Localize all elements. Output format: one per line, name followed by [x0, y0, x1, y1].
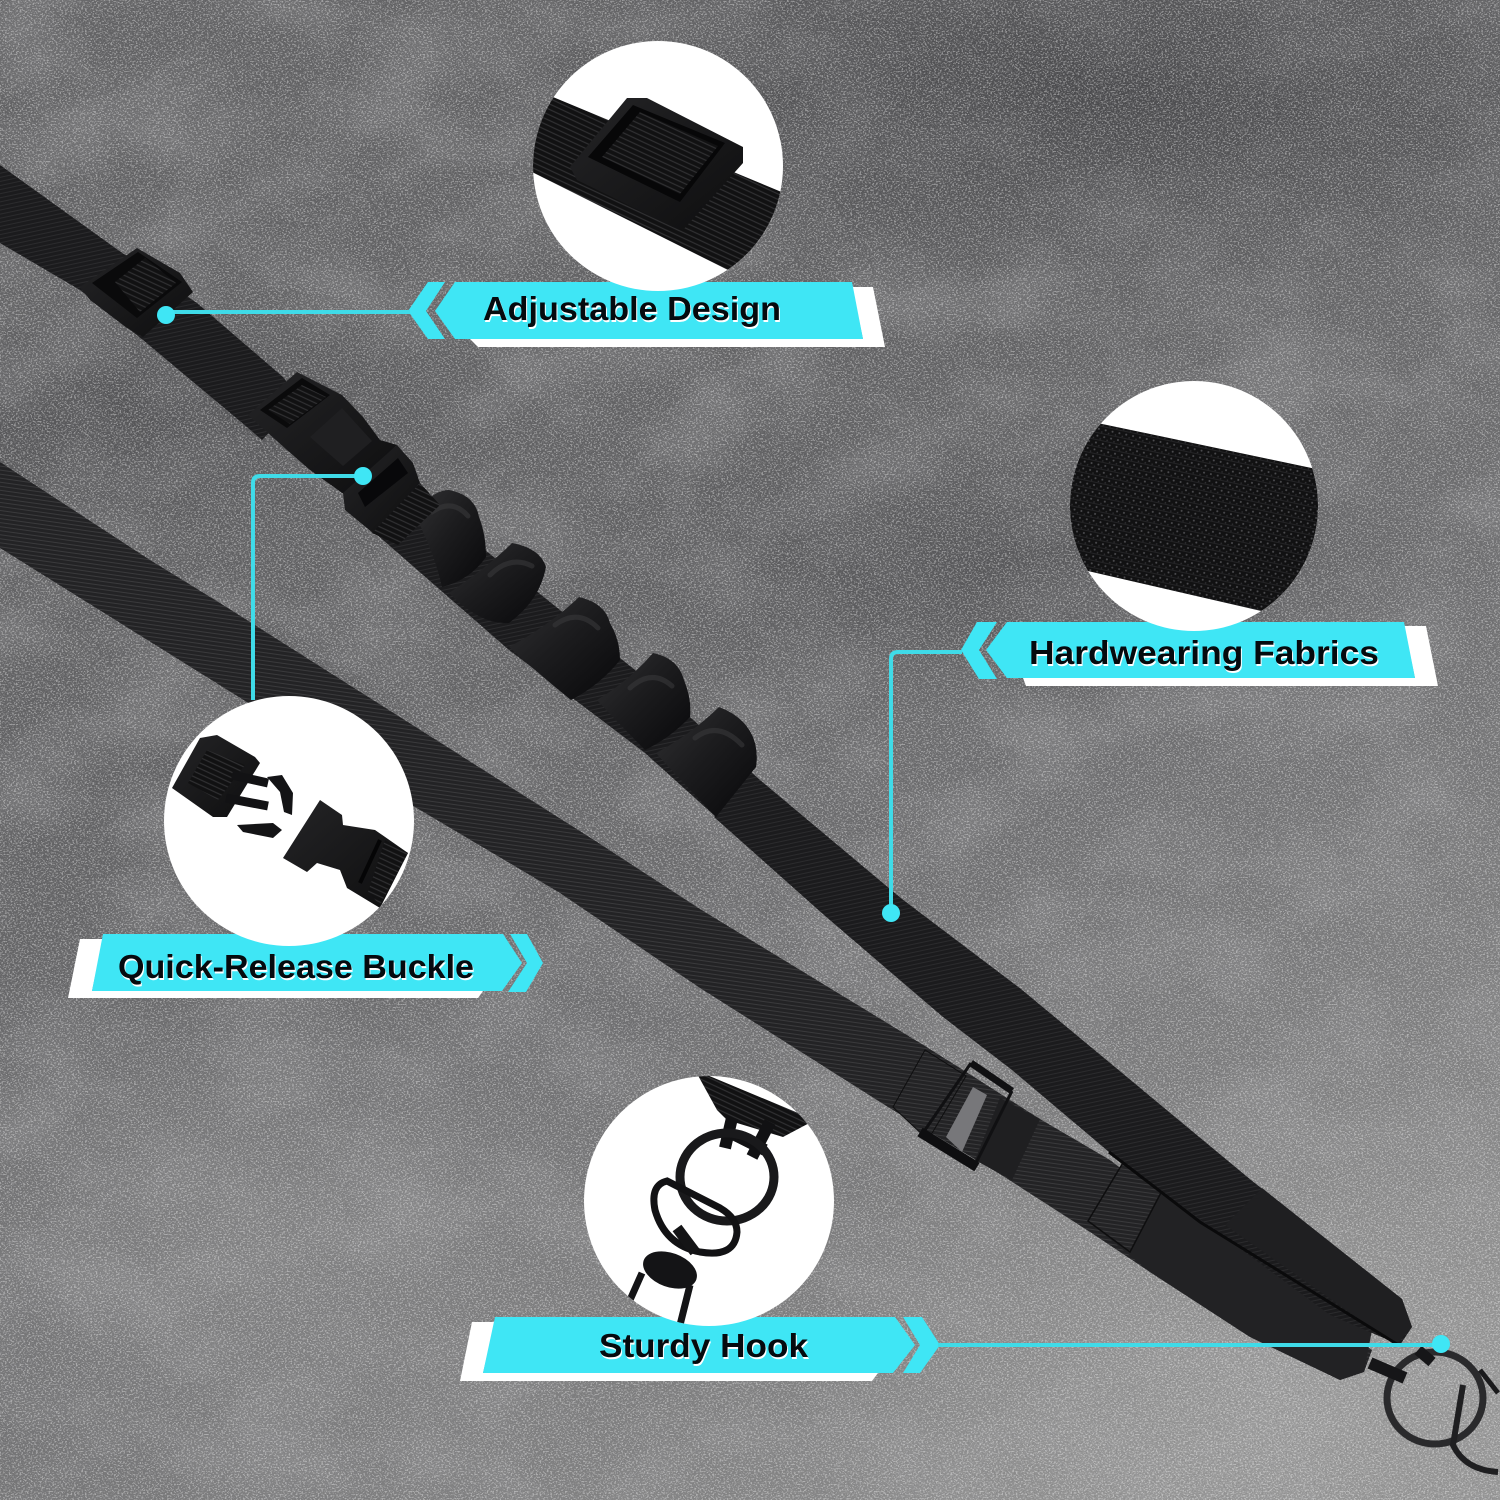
upper webbing strap, long section [714, 780, 1412, 1346]
lower strap padded end [1088, 1156, 1372, 1380]
lower webbing strap [0, 462, 1372, 1380]
label text: Hardwearing Fabrics: Hardwearing Fabrics [1029, 634, 1379, 671]
banner white backing [470, 287, 885, 347]
leader line [938, 1343, 1441, 1347]
leader line [891, 652, 962, 913]
label text: Sturdy Hook: Sturdy Hook [599, 1327, 809, 1364]
inset circle: swivel hook [584, 1070, 834, 1326]
quick-release buckle on strap [248, 372, 440, 545]
arrow chevron [903, 1317, 940, 1373]
callout: Sturdy Hook [460, 1317, 1450, 1381]
upper webbing strap, elastic base [375, 470, 760, 817]
banner cyan ribbon [92, 934, 522, 991]
label text: Adjustable Design: Adjustable Design [483, 290, 781, 327]
banner cyan ribbon [483, 1317, 915, 1373]
fold band near the junction [1088, 1156, 1165, 1252]
inset circle: open quick-release buckle [164, 696, 414, 946]
leader dot [1432, 1335, 1450, 1353]
banner white backing [460, 1322, 878, 1381]
leader dot [354, 467, 372, 485]
banner white backing [1023, 626, 1438, 686]
label text: Quick-Release Buckle: Quick-Release Buckle [118, 948, 474, 985]
leader dot [157, 306, 175, 324]
arrow chevron [508, 934, 543, 992]
callout: Hardwearing Fabrics [882, 622, 1438, 922]
leader line [166, 310, 410, 314]
upper webbing strap, left section [0, 165, 300, 440]
callout: Quick-Release Buckle [68, 467, 543, 998]
arrow chevron [408, 282, 445, 339]
slider buckle on lower strap [893, 1050, 1040, 1180]
arrow chevron [961, 622, 997, 679]
leader line [253, 476, 363, 700]
elastic ruffles [416, 490, 757, 817]
stitched seam [1109, 1152, 1400, 1346]
inset circle: webbing fabric close-up [1070, 381, 1318, 631]
banner cyan ribbon [435, 282, 863, 339]
banner white backing [68, 939, 483, 998]
hook hardware at strap end [1370, 1350, 1498, 1472]
upper strap padded end [1225, 1188, 1412, 1345]
leader dot [882, 904, 900, 922]
callout: Adjustable Design [157, 282, 885, 347]
inset circle: adjuster slider [533, 41, 783, 291]
slider buckle on upper strap [80, 248, 193, 337]
banner cyan ribbon [986, 622, 1415, 678]
